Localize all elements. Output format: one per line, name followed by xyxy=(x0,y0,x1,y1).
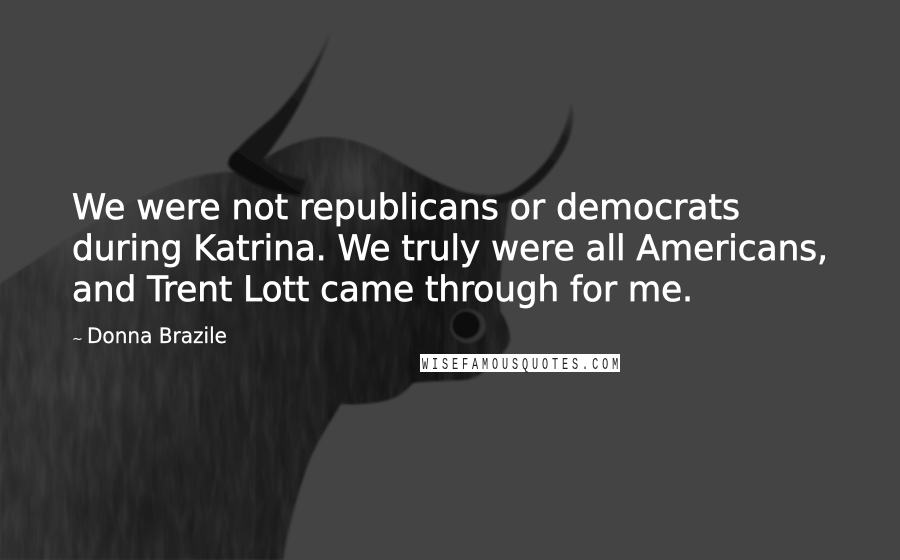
quote text: We were not republicans or democrats xyxy=(72,188,740,228)
quote text xyxy=(72,188,828,310)
quote text: and Trent Lott came through for me. xyxy=(72,270,693,310)
fur shading xyxy=(0,138,506,560)
bull nostril xyxy=(450,309,486,343)
quote text: during Katrina. We truly were all Americans, xyxy=(72,229,828,269)
author attribution: Donna Brazile xyxy=(87,324,227,348)
left horn xyxy=(228,27,332,196)
bull silhouette xyxy=(0,27,573,560)
author attribution: ~ xyxy=(72,332,83,347)
right horn xyxy=(488,102,573,202)
watermark badge: WISEFAMOUSQUOTES.COM xyxy=(422,356,618,375)
